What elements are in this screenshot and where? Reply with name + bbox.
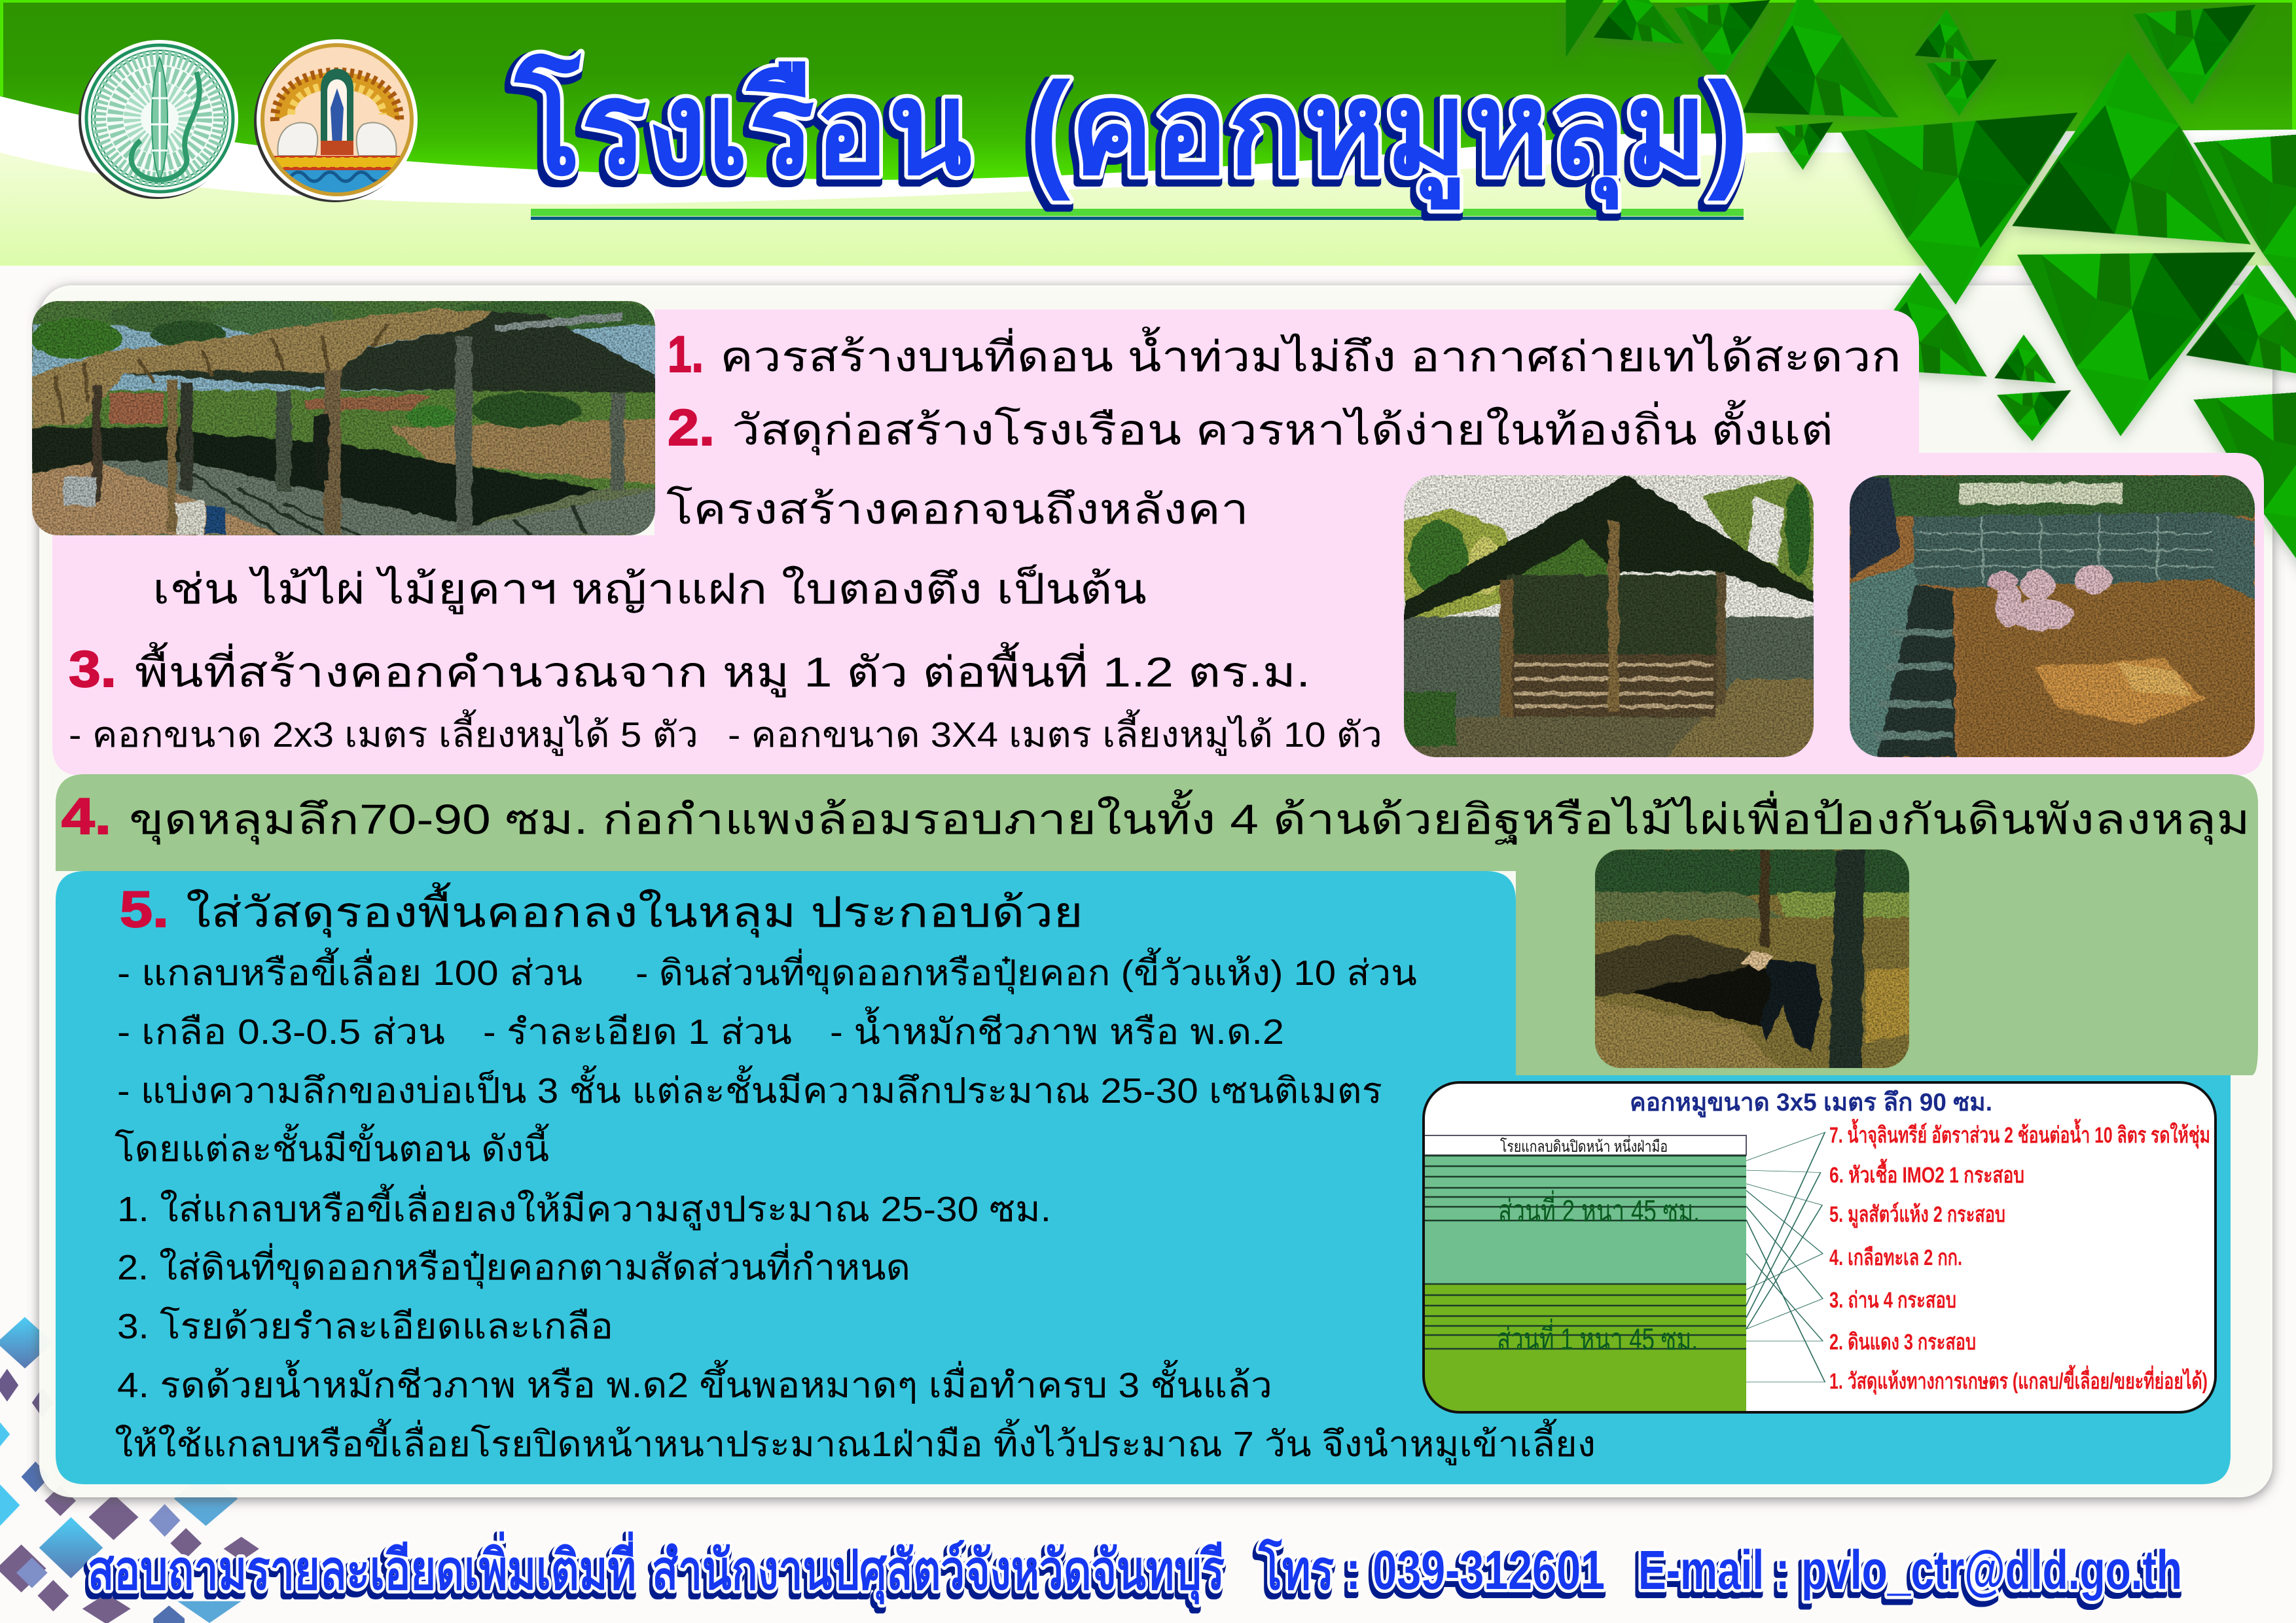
procedure 1: 1. ใส่แกลบหรือขี้เลื่อยลงให้มีความสูงประมาณ 25-30 ซม. xyxy=(117,1184,1051,1230)
step 2 text line 1: วัสดุก่อสร้างโรงเรือน ควรหาได้ง่ายในท้องถิ่น ตั้งแต่ xyxy=(732,400,1833,455)
layering note: - แบ่งความลึกของบ่อเป็น 3 ชั้น แต่ละชั้นมีความลึกประมาณ 25-30 เซนติเมตร xyxy=(117,1065,1382,1111)
step 3 pen size 3x4: - คอกขนาด 3X4 เมตร เลี้ยงหมูได้ 10 ตัว xyxy=(728,709,1382,756)
footer: inquiry: สอบถามรายละเอียดเพิ่มเติมที่ xyxy=(88,1531,636,1601)
footer contact xyxy=(88,1531,2182,1605)
cover label: โรยแกลบดินปิดหน้า หนึ่งฝ่ามือ xyxy=(1500,1135,1668,1156)
layer: upper section xyxy=(1424,1155,1746,1284)
step 1 text: ควรสร้างบนที่ดอน น้ำท่วมไม่ถึง อากาศถ่ายเทได้สะดวก xyxy=(720,327,1901,380)
footer: office: สำนักงานปศุสัตว์จังหวัดจันทบุรี xyxy=(652,1539,1225,1605)
decorative green triangles top right xyxy=(1566,0,2296,588)
step 1 number: 1. xyxy=(668,325,704,383)
ingredient 5: 5. มูลสัตว์แห้ง 2 กระสอบ xyxy=(1829,1202,2005,1228)
diagram: pen layers xyxy=(1424,1082,2215,1412)
ingredient 6: 6. หัวเชื้อ IMO2 1 กระสอบ xyxy=(1829,1158,2024,1188)
footer: phone: โทร : 039-312601 xyxy=(1258,1539,1605,1601)
panel: green step 4 xyxy=(56,774,2258,1075)
ingredient 4: 4. เกลือทะเล 2 กก. xyxy=(1829,1245,1962,1270)
material: bio-extract: - น้ำหมักชีวภาพ หรือ พ.ด.2 xyxy=(830,1007,1284,1052)
section 1 label: ส่วนที่ 1 หนา 45 ซม. xyxy=(1497,1318,1698,1356)
photo: bamboo hut xyxy=(1404,475,1814,757)
procedure 2: 2. ใส่ดินที่ขุดออกหรือปุ๋ยคอกตามสัดส่วนที่กำหนด xyxy=(117,1243,910,1289)
logo: department seal xyxy=(79,40,238,199)
panel: pink top strip xyxy=(52,310,2264,776)
title underline xyxy=(531,209,1744,220)
title: โรงเรือน xyxy=(514,52,972,202)
step 4 text: ขุดหลุมลึก70-90 ซม. ก่อกำแพงล้อมรอบภายในทั้ง 4 ด้านด้วยอิฐหรือไม้ไผ่เพื่อป้องกันดินพังลงหลุม xyxy=(129,789,2250,845)
layer: top cover xyxy=(1424,1135,1746,1155)
step 5 number: 5. xyxy=(120,880,169,938)
ingredient 3: 3. ถ่าน 4 กระสอบ xyxy=(1829,1288,1956,1313)
step 3 number: 3. xyxy=(69,640,117,698)
diagram outline xyxy=(1424,1082,2215,1412)
decorative diamonds bottom left xyxy=(0,1317,259,1623)
layer: lower section xyxy=(1424,1284,1746,1412)
logo: province seal xyxy=(254,39,418,202)
diagram title: คอกหมูขนาด 3x5 เมตร ลึก 90 ซม. xyxy=(1630,1089,1992,1118)
section 2 label: ส่วนที่ 2 หนา 45 ซม. xyxy=(1498,1190,1700,1228)
panel: blue step 5 xyxy=(56,871,2231,1484)
layering intro: โดยแต่ละชั้นมีขั้นตอน ดังนี้ xyxy=(115,1124,549,1169)
ingredient 2: 2. ดินแดง 3 กระสอบ xyxy=(1829,1330,1976,1355)
step 3 pen size 2x3: - คอกขนาด 2x3 เมตร เลี้ยงหมูได้ 5 ตัว xyxy=(69,709,698,756)
step 2 number: 2. xyxy=(668,399,715,456)
photo: piglets in block pen xyxy=(1850,475,2255,757)
material: salt: - เกลือ 0.3-0.5 ส่วน xyxy=(117,1012,445,1052)
step 3 text: พื้นที่สร้างคอกคำนวณจาก หมู 1 ตัว ต่อพื้นที่ 1.2 ตร.ม. xyxy=(135,642,1310,698)
title: (คอกหมูหลุม) xyxy=(1029,56,1749,210)
photo: digging the pit xyxy=(1577,831,1931,1086)
closing instruction: ให้ใช้แกลบหรือขี้เลื่อยโรยปิดหน้าหนาประมาณ1ฝ่ามือ ทิ้งไว้ประมาณ 7 วัน จึงนำหมูเข้าเลี้ยง xyxy=(115,1419,1596,1465)
step 5 heading: ใส่วัสดุรองพื้นคอกลงในหลุม ประกอบด้วย xyxy=(186,882,1083,938)
photo: thatched pen xyxy=(32,301,655,535)
step 2 text line 3: เช่น ไม้ไผ่ ไม้ยูคาฯ หญ้าแฝก ใบตองตึง เป็นต้น xyxy=(152,565,1147,615)
title xyxy=(514,52,1749,210)
material: bran: - รำละเอียด 1 ส่วน xyxy=(483,1012,792,1052)
material: soil or manure: - ดินส่วนที่ขุดออกหรือปุ๋ยคอก (ขี้วัวแห้ง) 10 ส่วน xyxy=(636,948,1417,995)
material: rice husk: - แกลบหรือขี้เลื่อย 100 ส่วน xyxy=(117,948,583,993)
header banner xyxy=(0,0,2296,266)
procedure 4: 4. รดด้วยน้ำหมักชีวภาพ หรือ พ.ด2 ขึ้นพอหมาดๆ เมื่อทำครบ 3 ชั้นแล้ว xyxy=(117,1360,1272,1405)
connector lines xyxy=(1746,1132,1825,1382)
procedure 3: 3. โรยด้วยรำละเอียดและเกลือ xyxy=(117,1306,613,1346)
main white panel xyxy=(39,285,2272,1497)
step 4 number: 4. xyxy=(62,787,111,845)
step 2 text line 2: โครงสร้างคอกจนถึงหลังคา xyxy=(666,486,1249,533)
